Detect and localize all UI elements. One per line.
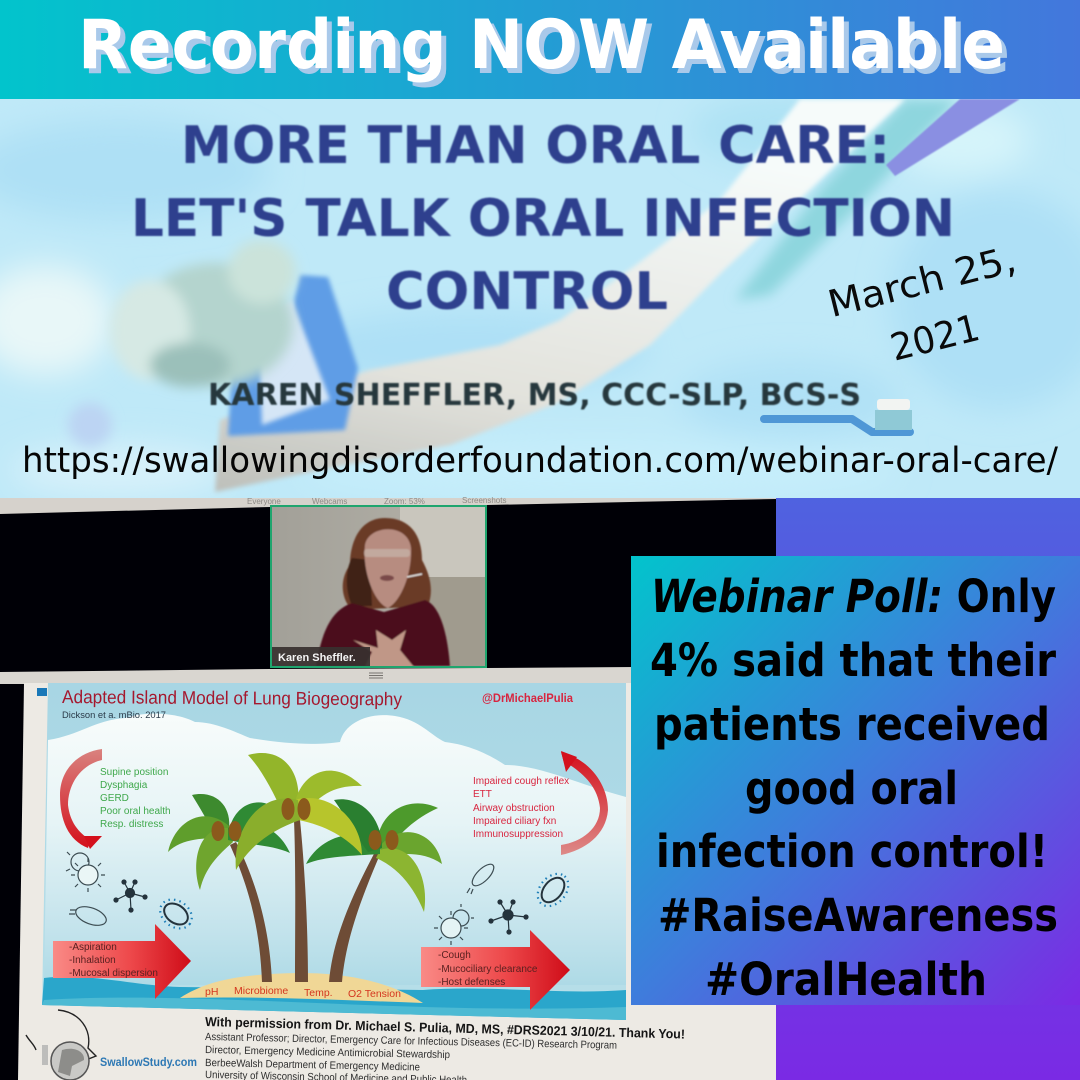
icon: large toothbrush [68, 99, 1020, 492]
video tile: Karen Sheffler [270, 505, 487, 668]
heading: webinar title [131, 116, 955, 322]
curved arrow left [60, 749, 102, 849]
zoom toolbar strip [0, 496, 776, 514]
slide: Adapted Island Model [37, 683, 626, 1020]
red arrow left: -Mucosal dispersion [69, 968, 158, 979]
green factor list: GERD [100, 793, 129, 804]
credit text: BerbeeWalsh Department of Emergency Medicine [205, 1057, 420, 1074]
red arrow left [53, 924, 191, 999]
heading: webinar title: CONTROL [386, 262, 668, 322]
headset [407, 574, 422, 577]
panel: webinar title card [0, 95, 1080, 500]
callout: webinar poll [631, 556, 1080, 1006]
zoom toolbar strip: Screenshots [462, 496, 506, 505]
SwallowStudy logo [26, 1010, 197, 1080]
island labels [205, 985, 401, 1000]
citation: Dickson et a. mBio. 2017 [62, 710, 166, 721]
slide title: Adapted Island Model of Lung Biogeography [62, 686, 403, 709]
strip below video with grip icon [0, 666, 776, 684]
slide photo frame [18, 683, 776, 1080]
name tag: Karen Sheffler. [278, 652, 356, 664]
red factor list: Immunosuppression [473, 829, 563, 840]
credit text: Assistant Professor; Director, Emergency Care for Infectious Diseases (EC-ID) Research Program [205, 1031, 617, 1052]
blue germ right [531, 868, 575, 912]
foam [68, 240, 296, 447]
credit text: Director, Emergency Medicine Antimicrobial Stewardship [205, 1044, 450, 1061]
green factor list: Poor oral health [100, 806, 171, 817]
poll text [650, 570, 1058, 1006]
island labels: Temp. [304, 987, 333, 999]
green factor list [100, 767, 171, 830]
zoom toolbar strip: Webcams [312, 497, 347, 506]
date: 2021 [886, 306, 984, 370]
island [180, 973, 423, 1003]
red factor list [473, 776, 569, 840]
red factor list: ETT [473, 789, 492, 800]
credit text: With permission from Dr. Michael S. Pulia, MD, MS, #DRS2021 3/10/21. Thank You! [205, 1014, 685, 1042]
palm trees [168, 753, 442, 982]
red factor list: Impaired cough reflex [473, 776, 569, 787]
title: Recording NOW Available: Recording NOW Available [83, 11, 1010, 90]
red arrow right [421, 930, 570, 1010]
green factor list: Resp. distress [100, 819, 163, 830]
center palm fronds [248, 753, 299, 815]
panel: webinar screenshot photo [0, 496, 776, 1080]
link: https://swallowingdisorderfoundation.com/webinar-oral-care/ [22, 441, 1058, 481]
poll text: good oral [745, 762, 958, 815]
green factor list: Supine position [100, 767, 168, 778]
credit text [205, 1014, 685, 1080]
top banner [0, 0, 1080, 99]
slide sky and clouds [42, 683, 626, 1020]
SwallowStudy logo: SwallowStudy.com [100, 1057, 197, 1069]
red arrow right: -Host defenses [438, 977, 505, 988]
date [829, 249, 1014, 360]
island labels: pH [205, 986, 218, 998]
red factor list: Airway obstruction [473, 803, 555, 814]
sea [42, 977, 626, 1020]
right palm fronds [376, 803, 438, 852]
poll text: #OralHealth [705, 953, 987, 1006]
presenter name: KAREN SHEFFLER, MS, CCC-SLP, BCS-S [208, 378, 861, 413]
blue germ left [155, 894, 197, 934]
hand [353, 630, 414, 667]
name tag [272, 647, 370, 666]
red factor list: Impaired ciliary fxn [473, 816, 556, 827]
slide handle: @DrMichaelPulia [482, 693, 574, 705]
island labels: Microbiome [234, 985, 288, 997]
red arrow right: -Mucociliary clearance [438, 964, 538, 975]
poll text: Webinar Poll: Only [651, 570, 1056, 623]
hair [343, 518, 431, 610]
curved arrow right [561, 751, 608, 855]
left palm fronds [192, 794, 229, 835]
heading: webinar title: MORE THAN ORAL CARE: [181, 116, 890, 176]
red arrow left: -Aspiration [69, 942, 117, 953]
germs right [434, 861, 528, 945]
island labels: O2 Tension [348, 988, 401, 1000]
zoom toolbar strip: Zoom: 53% [384, 497, 425, 506]
zoom toolbar strip: Everyone [247, 497, 281, 506]
trunks [230, 842, 272, 982]
icon: small toothbrush [764, 399, 912, 432]
germs left [66, 852, 147, 929]
heading: webinar title: LET'S TALK ORAL INFECTION [131, 189, 955, 249]
molecule [114, 880, 147, 912]
date: March 25, [824, 238, 1020, 326]
title: Recording NOW Available: Recording NOW Available [78, 6, 1005, 85]
green factor list: Dysphagia [100, 780, 148, 791]
shirt [316, 600, 450, 666]
red arrow left: -Inhalation [69, 955, 116, 966]
slide bullet [37, 688, 47, 696]
red arrow right: -Cough [438, 950, 471, 961]
lungs [212, 798, 398, 850]
panel: gradient background right [776, 498, 1080, 1080]
face [365, 529, 411, 608]
